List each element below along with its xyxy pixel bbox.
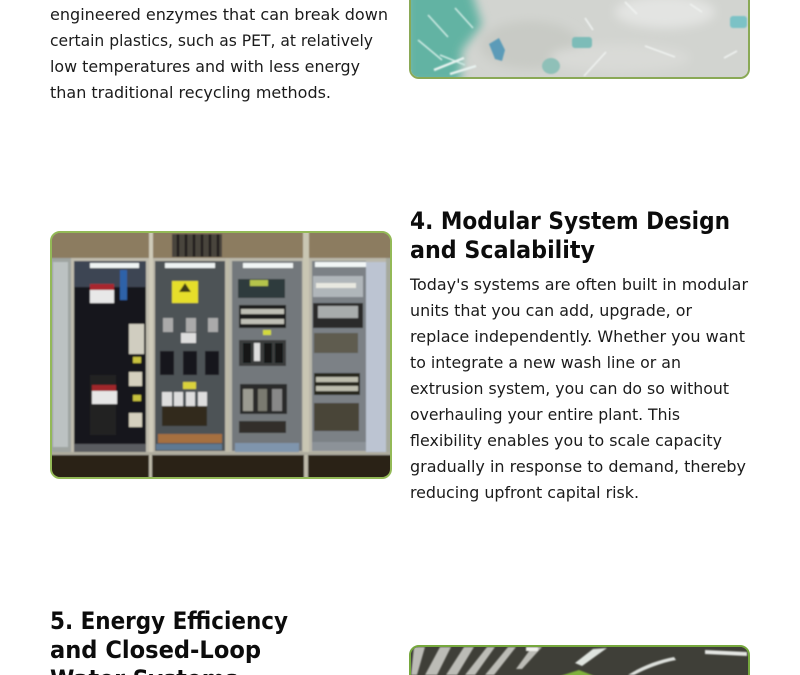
heading: section 4: and Scalability <box>410 236 595 264</box>
text block: section 4 paragraph: overhauling your entire plant. This <box>410 405 680 424</box>
heading: section 5: and Closed-Loop <box>50 636 261 664</box>
cabinet section 1 <box>71 258 149 456</box>
text block: section 4 paragraph: replace independently. Whether you want <box>410 327 745 346</box>
text block: section 4 paragraph: reducing upfront capital risk. <box>410 483 639 502</box>
cabinet section 4 with right door <box>308 258 392 456</box>
text block: enzymes paragraph <box>50 5 388 102</box>
text block: section 4 paragraph: units that you can add, upgrade, or <box>410 301 692 320</box>
text block: enzymes paragraph: than traditional recycling methods. <box>50 83 331 102</box>
image: shredded plastic flakes <box>405 0 749 85</box>
heading: section 4 <box>410 207 730 264</box>
image: plant ceiling <box>410 646 749 675</box>
cabinet section 3 <box>228 258 305 456</box>
text block: section 4 paragraph: to integrate a new wash line or an <box>410 353 681 372</box>
cabinet section 2 <box>153 258 227 456</box>
text block: section 4 paragraph: flexibility enables you to scale capacity <box>410 431 722 450</box>
text block: section 4 paragraph: Today's systems are often built in modular <box>409 275 748 294</box>
text block: section 4 paragraph <box>409 275 748 502</box>
image: electrical control cabinet <box>50 231 392 479</box>
heading: section 5: 5. Energy Efficiency <box>50 607 288 635</box>
text block: section 4 paragraph: extrusion system, you can do so without <box>410 379 729 398</box>
left open door <box>50 258 71 458</box>
heading: section 5 <box>50 607 288 675</box>
text block: section 4 paragraph: gradually in response to demand, thereby <box>410 457 746 476</box>
text block: enzymes paragraph: engineered enzymes that can break down <box>50 5 388 24</box>
text block: enzymes paragraph: certain plastics, such as PET, at relatively <box>50 31 373 50</box>
heading: section 4: 4. Modular System Design <box>410 207 730 235</box>
posts <box>149 231 153 479</box>
cabinet top panel and vent <box>50 231 392 258</box>
text block: enzymes paragraph: low temperatures and with less energy <box>50 57 360 76</box>
plinth <box>50 455 392 479</box>
